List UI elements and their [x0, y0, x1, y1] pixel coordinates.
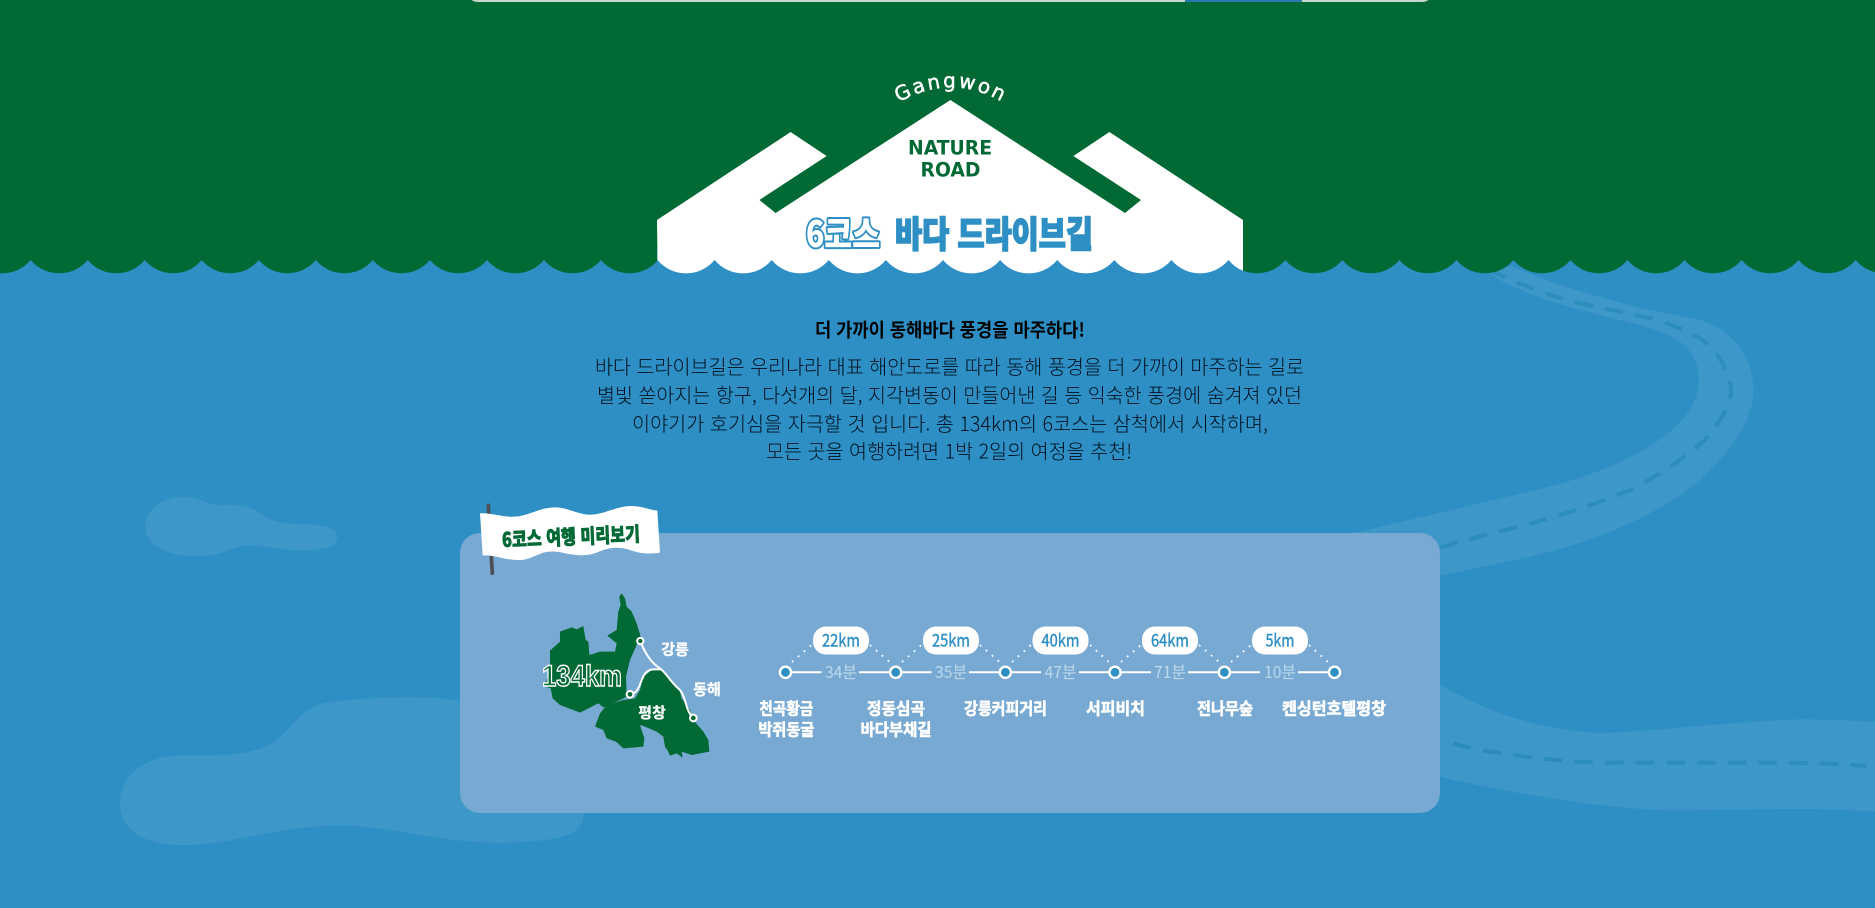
timeline: stop names: 박쥐동굴	[758, 716, 814, 740]
map labels: 평창	[638, 702, 666, 723]
map labels: 강릉	[661, 638, 689, 660]
timeline: distance pills: 64km	[1151, 626, 1189, 652]
timeline: stop nodes	[780, 667, 1340, 678]
timeline: distance pills	[813, 626, 1308, 654]
logo: curved Gangwon: Gangwon	[895, 76, 1004, 101]
timeline: durations: 35분	[935, 659, 967, 683]
logo: NATURE ROAD: ROAD	[920, 159, 980, 182]
timeline: stop names: 강릉커피거리	[964, 696, 1047, 720]
map labels: 동해	[693, 678, 721, 700]
logo: NATURE ROAD: NATURE	[908, 136, 992, 159]
header: green scalloped band	[0, 0, 1875, 273]
timeline: dotted lines to pills	[792, 645, 1328, 662]
map: region with route	[545, 593, 709, 758]
timeline: connecting lines	[792, 671, 1328, 673]
timeline: durations: 47분	[1044, 659, 1076, 683]
timeline: stop names: 켄싱턴호텔평창	[1282, 696, 1386, 720]
background blob: upper left	[145, 497, 337, 556]
timeline: durations	[825, 659, 1296, 683]
background blob: lower left	[120, 697, 583, 845]
intro body text: 별빛 쏟아지는 항구, 다섯개의 달, 지각변동이 만들어낸 길 등 익숙한 풍경에 숨겨져 있던	[597, 380, 1302, 408]
intro heading: 더 가까이 동해바다 풍경을 마주하다!	[815, 316, 1085, 342]
timeline: stop names: 서피비치	[1086, 696, 1145, 720]
map: north region	[545, 593, 641, 713]
distance: 134km: 134km	[542, 660, 622, 693]
blue gap beneath roof	[657, 250, 1243, 280]
timeline: durations: 34분	[825, 659, 857, 683]
timeline: distance pills: 22km	[822, 626, 860, 652]
timeline: stop names	[758, 696, 1386, 740]
timeline: stop names: 바다부채길	[860, 716, 932, 740]
background road: lower right	[1433, 680, 1875, 812]
intro body text	[595, 351, 1304, 464]
flag: course preview label	[480, 505, 660, 573]
intro body text: 이야기가 호기심을 자극할 것 입니다. 총 134km의 6코스는 삼척에서 시작하며,	[632, 408, 1268, 437]
map: route	[627, 638, 697, 721]
timeline: stop names: 정동심곡	[867, 696, 925, 720]
map: south region	[595, 669, 709, 758]
top navigation bar edge	[470, 0, 1430, 2]
logo: NATURE ROAD	[908, 136, 992, 182]
intro body text: 바다 드라이브길은 우리나라 대표 해안도로를 따라 동해 풍경을 더 가까이 마주하는 길로	[595, 351, 1304, 380]
timeline: stop names: 전나무숲	[1197, 696, 1253, 720]
title: 6코스 바다 드라이브길: 6코스	[806, 206, 880, 258]
timeline: distance pills: 25km	[932, 626, 970, 652]
background road: upper right curve	[1333, 267, 1753, 580]
timeline: durations: 71분	[1154, 659, 1186, 683]
map labels	[638, 638, 721, 723]
timeline: stop names: 천곡황금	[759, 696, 813, 720]
title: 6코스 바다 드라이브길	[806, 206, 1093, 258]
flag text: 6코스 여행 미리보기	[501, 518, 641, 553]
logo: white roof shape	[657, 100, 1243, 273]
intro body text: 모든 곳을 여행하려면 1박 2일의 여정을 추천!	[766, 436, 1132, 464]
timeline: durations: 10분	[1264, 659, 1296, 683]
title: 6코스 바다 드라이브길: 바다 드라이브길	[895, 206, 1093, 258]
timeline: distance pills: 5km	[1266, 626, 1294, 652]
panel: course preview	[460, 533, 1440, 813]
logo: curved Gangwon	[895, 76, 1004, 101]
timeline: distance pills: 40km	[1042, 626, 1080, 652]
